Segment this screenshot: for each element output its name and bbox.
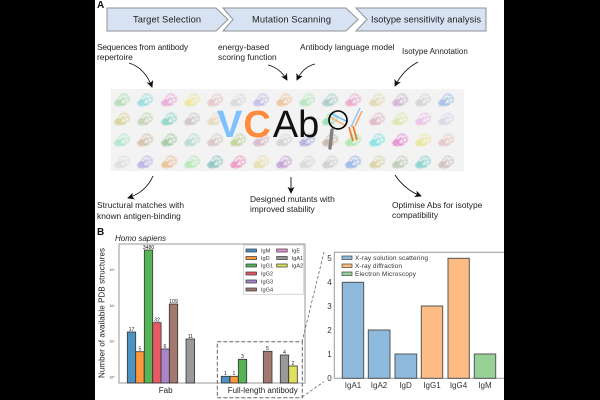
legend: IgA1 [292,256,303,262]
text: designed mutants: Designed mutants with [250,194,335,204]
x tick labels: IgA1 [345,381,362,390]
x tick labels: IgA2 [371,381,388,390]
full-length value labels: 1 [233,371,236,377]
full-length bars [221,351,297,383]
chevron: mutation scanning: Mutation Scanning [252,14,331,24]
text: sequences: Sequences from antibody [97,42,189,52]
x tick labels: IgD [399,381,412,390]
x tick labels: IgG4 [450,381,468,390]
panel label B: B [97,227,104,238]
legend: IgG3 [261,280,273,286]
y tick labels: 0 [327,374,332,383]
arrow: to optimise Abs [395,175,421,196]
full-length value labels: 2 [292,361,295,367]
left black border [0,0,95,400]
bar chart: experimental methods [327,252,504,390]
panel label A: A [97,0,104,11]
arrow: language model to panel [297,64,315,80]
dashed zoom box [217,342,302,398]
dashed connector lines [302,252,324,397]
y tick labels: 1 [327,350,332,359]
workflow chevrons [107,8,486,31]
legend: IgE [292,248,300,254]
method legend [342,255,428,278]
method bars [342,258,496,378]
method legend: X-ray solution scattering [355,255,428,262]
y ticks: 10² [109,304,115,308]
x tick labels: IgM [478,381,492,390]
text: isotype annotation: Isotype Annotation [402,47,468,56]
chevron: isotype sensitivity analysis [356,8,486,31]
chart title: Homo sapiens: Homo sapiens [115,234,166,243]
chevron: isotype sensitivity analysis: Isotype sensitivity analysis [371,14,481,24]
y tick labels [327,254,332,383]
legend: IgG4 [261,288,273,294]
full-length value labels [224,346,295,377]
arrow: isotype annotation to panel [395,62,418,86]
y ticks [109,268,115,380]
text: energy-based scoring: energy-based [218,42,269,52]
text: structural matches: Structural matches with [97,200,184,210]
y tick labels: 3 [327,302,332,311]
legend: IgG2 [261,272,273,278]
Fab axis label: Fab [159,386,173,395]
y tick labels: 2 [327,326,332,335]
arrow: sequences to panel [129,63,152,87]
Fab value labels: 109 [169,299,178,305]
icon: magnifier with antibody [329,108,362,148]
panel: VCAb structure grid [111,89,464,171]
antibody structure thumbnails [115,94,454,168]
Fab value labels [129,245,193,352]
method legend: Electron Microscopy [355,271,417,278]
y tick labels: 4 [327,278,332,287]
legend: IgA2 [292,264,303,270]
Fab value labels: 6 [164,344,167,350]
chevron: target selection: Target Selection [133,14,201,24]
Fab value labels: 11 [188,334,193,340]
full-length value labels: 4 [283,350,286,356]
y ticks: 10³ [109,268,115,272]
chevron: mutation scanning [223,8,358,31]
text: optimise abs: Optimise Abs for isotype [392,200,482,210]
right black border [504,0,600,400]
full-length value labels: 5 [266,346,269,352]
y ticks: 10¹ [109,340,115,344]
text: designed mutants: improved stability [250,204,316,214]
arrow: to structural matches [128,176,153,198]
Fab value labels: 17 [129,327,134,333]
Fab bars [127,250,195,383]
text: sequences: repertoire [97,52,133,62]
Fab value labels: 3480 [143,245,154,251]
full-length value labels: 3 [241,354,244,360]
chevron: target selection [107,8,228,31]
bar chart: PDB structures by isotype [109,244,305,395]
full-length value labels: 1 [224,371,227,377]
text: energy-based scoring: scoring function [218,52,277,62]
x tick labels [345,381,492,390]
arrow: to designed mutants [290,177,292,193]
text: optimise abs: compatibility [392,210,439,220]
y axis label: Number of available PDB structures [98,248,106,378]
VCAb logo text: VCAb [217,104,319,146]
legend: IgG1 [261,264,273,270]
x tick labels: IgG1 [423,381,441,390]
method legend: X-ray diffraction [355,263,402,270]
Fab value labels: 32 [154,318,160,324]
arrow: scoring to panel [268,65,287,80]
full-length axis label: Full-length antibody [228,386,298,395]
y tick labels: 5 [327,254,332,263]
legend [244,245,304,294]
y ticks: 10⁰ [109,376,115,380]
Fab value labels: 5 [139,346,142,352]
legend: IgD [261,256,270,262]
legend: IgM [261,248,271,254]
text: structural matches: known antigen-binding [97,211,181,221]
text: language model: Antibody language model [300,42,395,52]
